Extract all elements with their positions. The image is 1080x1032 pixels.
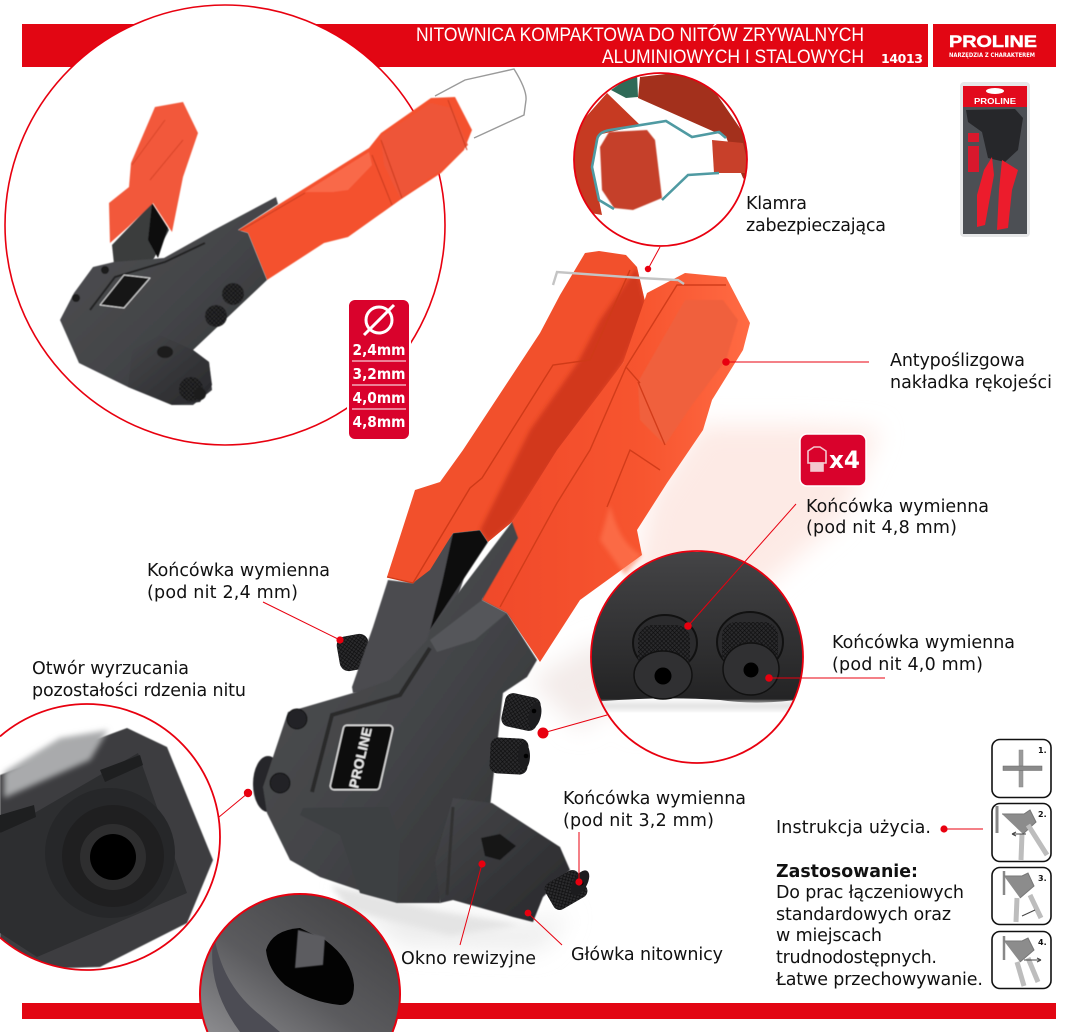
main tool: right handle [482,273,750,662]
step 1: drill [992,740,1051,798]
product code: 14013 [881,51,923,66]
step 4: release: 4. [1038,938,1047,947]
panel: interchangeable tips detail [585,551,810,763]
header title bar [22,24,928,68]
diameter list: 2,4mm [352,341,406,359]
logo panel: PROLINE [949,32,1037,51]
product title [416,24,864,68]
text block: application: Łatwe przechowywanie. [775,970,983,990]
badge: four tips: x4 [829,446,860,474]
small tool: long handle [238,97,472,280]
label: anti-slip grip: Antypoślizgowa [890,351,1025,371]
main tool: knobs [489,692,593,912]
small tool: short handle [109,102,198,264]
small tool: safety clip [435,69,526,138]
step 4: release [992,932,1051,988]
small tool: body [60,197,278,405]
step 3: squeeze [992,868,1051,924]
label: tip 3.2: Końcówka wymienna [563,789,746,809]
main tool: knob back [335,632,373,673]
label: instructions: Instrukcja użycia. [776,818,931,838]
badge: rivet diameters [348,299,410,440]
label: anti-slip grip: nakładka rękojeści [890,373,1052,393]
product title: NITOWNICA KOMPAKTOWA DO NITÓW ZRYWALNYCH [416,24,864,46]
step 2: insert rivet [992,804,1051,862]
main tool photo [253,251,750,935]
label: tip 3.2: (pod nit 3,2 mm) [563,811,714,831]
label: safety clip: Klamra [746,194,807,214]
bottom bar [22,1003,1056,1019]
main tool: nose [435,798,570,922]
main tool: logo plate: PROLINE [346,726,375,790]
diameter list: 4,0mm [352,389,406,407]
logo panel: NARZĘDZIA Z CHARAKTEREM [949,51,1035,59]
leader lines [219,247,983,945]
icon: diameter symbol [364,305,394,335]
label: ejection hole: Otwór wyrzucania [32,659,189,679]
diameter list [352,341,406,431]
step 2: insert rivet: 2. [1038,810,1047,819]
label: tip 2.4: Końcówka wymienna [147,561,330,581]
product title: ALUMINIOWYCH I STALOWYCH [602,47,864,68]
label: safety clip: zabezpieczająca [746,216,886,236]
text block: application: w miejscach [776,926,882,946]
main tool: logo plate [334,726,389,790]
instruction steps [992,740,1051,988]
label: inspection window: Okno rewizyjne [401,949,536,969]
icon: nut [808,447,826,471]
label: tip 4.8: (pod nit 4,8 mm) [806,518,957,538]
badge: four tips [800,434,866,486]
main tool: left handle [387,251,647,583]
label: tip 2.4: (pod nit 2,4 mm) [147,583,298,603]
main tool: screws [270,709,307,793]
step 1: drill: 1. [1038,746,1047,755]
panel: core ejection hole detail [0,704,220,970]
label: tip 4.0: (pod nit 4,0 mm) [832,655,983,675]
small tool: logo plate [100,275,150,308]
label: ejection hole: pozostałości rdzenia nitu [32,681,246,701]
diameter list: 3,2mm [352,365,406,383]
diameter list: 4,8mm [352,413,406,431]
panel: blister pack photo [960,82,1030,237]
text block: application: trudnodostępnych. [776,948,937,968]
shadow under head [330,885,520,935]
logo panel [933,24,1056,67]
panel: blister pack photo: PROLINE [974,97,1017,106]
panel: inspection window detail [200,894,400,1032]
main tool: head body [253,522,537,903]
pale background shadow of the tool [340,425,880,950]
label: head: Główka nitownicy [571,945,723,965]
panel: full tool view circle [5,5,526,445]
label: tip 4.0: Końcówka wymienna [832,633,1015,653]
text block: application: Zastosowanie: [776,862,918,882]
main tool: rear dark arm [352,530,488,693]
text block: application: standardowych oraz [776,905,951,925]
main tool: safety clip [553,272,684,285]
text block: application [775,862,983,990]
text block: application: Do prac łączeniowych [776,883,964,903]
label: tip 4.8: Końcówka wymienna [806,497,989,517]
step 3: squeeze: 3. [1038,874,1047,883]
panel: safety clip detail [570,70,755,246]
